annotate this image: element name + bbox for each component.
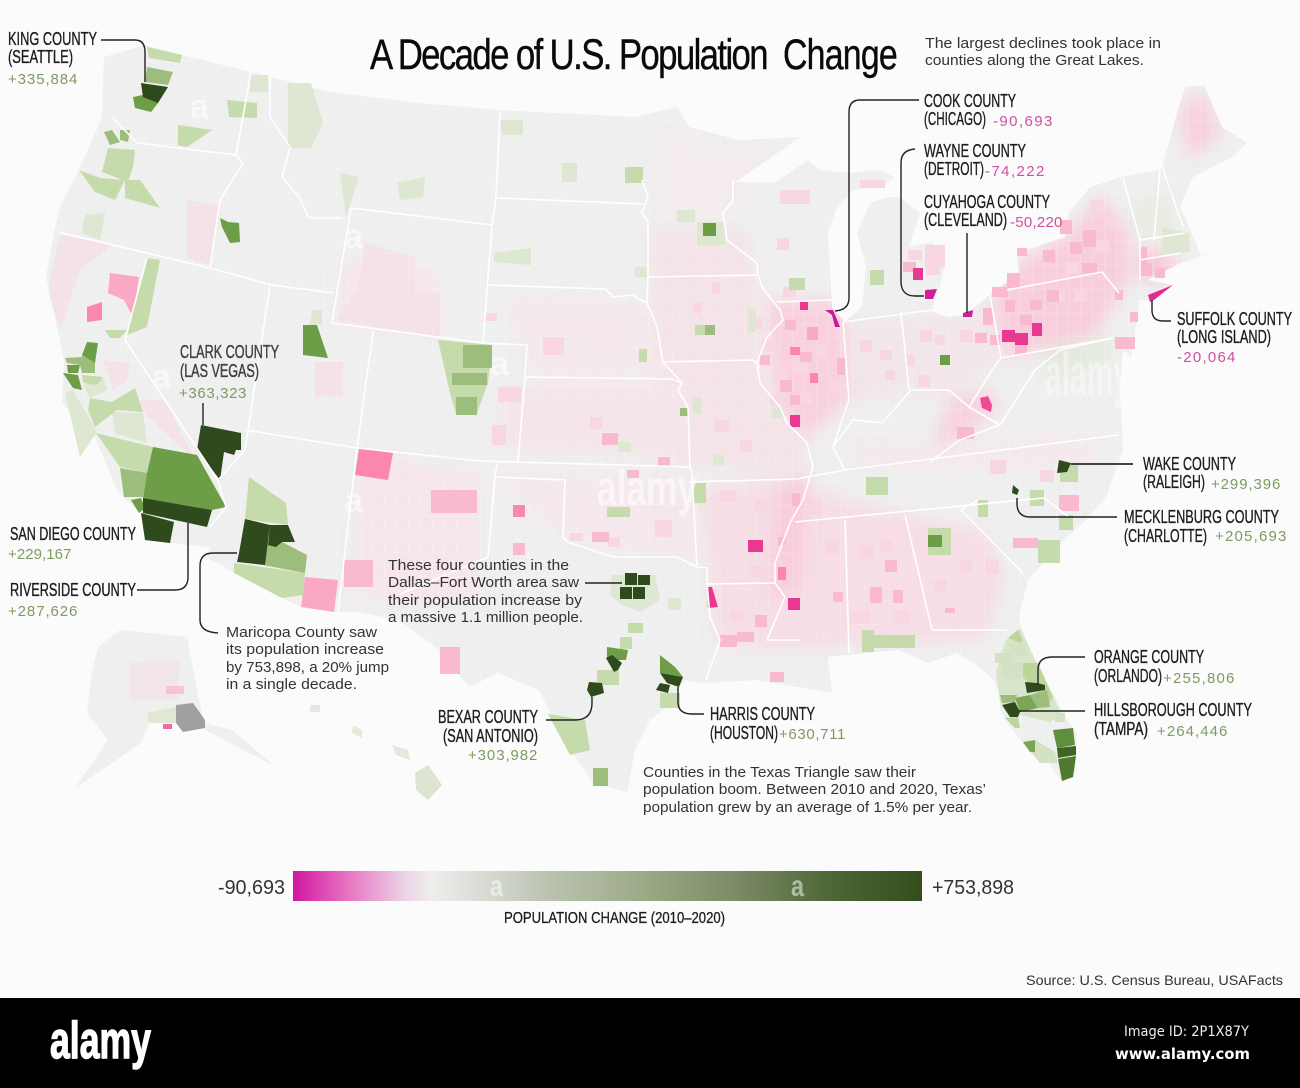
callout: Bexar County: BEXAR COUNTY xyxy=(438,707,538,727)
legend gradient bar xyxy=(293,871,922,901)
callout: Orange County: (ORLANDO) xyxy=(1094,666,1162,686)
map inset: Alaska xyxy=(75,630,276,788)
callout: Riverside County xyxy=(8,523,188,620)
callout: Wake County: WAKE COUNTY xyxy=(1143,454,1236,474)
watermarks: a xyxy=(490,345,510,383)
regional colour wash xyxy=(48,92,1223,650)
state borders xyxy=(58,72,1185,680)
callout: Orange County xyxy=(1038,647,1235,687)
gray county xyxy=(176,703,205,732)
callout: Dallas-Fort Worth: their population increase by xyxy=(388,592,583,609)
counties: growing green xyxy=(63,47,1190,786)
Orange County (Orlando) xyxy=(1025,682,1045,693)
callout: Dallas-Fort Worth: a massive 1.1 million people. xyxy=(388,609,583,626)
callout: Cuyahoga County: -50,220 xyxy=(1010,214,1063,231)
callout: King County: KING COUNTY xyxy=(8,29,97,49)
callout: Orange County: +255,806 xyxy=(1163,670,1235,687)
callout: Dallas-Fort Worth: These four counties in the xyxy=(388,557,569,574)
callout: Harris County xyxy=(678,687,846,743)
callout: Clark County: CLARK COUNTY xyxy=(180,342,279,362)
callout: Cuyahoga County xyxy=(924,192,1063,313)
callout: King County xyxy=(8,29,145,88)
counties: pale pink xyxy=(485,180,1117,624)
Dallas-Fort Worth counties xyxy=(620,573,650,599)
callout: Dallas-Fort Worth xyxy=(388,557,622,626)
callout: Mecklenburg County xyxy=(1017,498,1287,546)
callout: Hillsborough County xyxy=(1019,700,1252,740)
counties: strong pink and magenta xyxy=(87,268,1173,612)
image id: Image ID: 2P1X87Y xyxy=(1124,1024,1249,1040)
callout: Mecklenburg County: +205,693 xyxy=(1215,528,1287,545)
callout: Harris County: +630,711 xyxy=(779,726,846,743)
source: Source: U.S. Census Bureau, USAFacts xyxy=(1026,972,1283,988)
callout: Cuyahoga County: CUYAHOGA COUNTY xyxy=(924,192,1050,212)
title: A Decade of U.S. Population xyxy=(370,31,767,79)
counties: medium pink xyxy=(344,220,1165,682)
map inset: Hawaii xyxy=(310,705,442,800)
legend maximum: +753,898 xyxy=(932,877,1014,899)
land base xyxy=(46,45,1247,792)
callout: Wayne County: (DETROIT) xyxy=(924,159,984,179)
callout: King County: +335,884 xyxy=(8,71,78,88)
legend: a xyxy=(791,870,804,903)
callout: Riverside County: RIVERSIDE COUNTY xyxy=(10,580,136,600)
callout: Cook County: -90,693 xyxy=(993,113,1053,130)
callout: Cook County xyxy=(835,91,1053,311)
callout: Maricopa County: in a single decade. xyxy=(226,676,357,693)
callout: Hillsborough County: +264,446 xyxy=(1157,723,1228,740)
legend minimum: -90,693 xyxy=(218,877,285,899)
Cuyahoga County (Cleveland) xyxy=(963,310,973,317)
callout: Orange County: ORANGE COUNTY xyxy=(1094,647,1204,667)
callout: Harris County: HARRIS COUNTY xyxy=(710,704,815,724)
watermarks: a xyxy=(344,482,364,520)
alamy logo: alamy xyxy=(50,1012,151,1070)
callout: Wake County xyxy=(1071,454,1281,493)
note: Texas Triangle: population boom. Between 2010 and 2020, Texas’ xyxy=(643,781,986,798)
callout: Hillsborough County: (TAMPA) xyxy=(1094,719,1148,739)
callout: San Diego County xyxy=(8,524,136,563)
watermarks: alamy xyxy=(1045,341,1130,408)
King County (Seattle) xyxy=(141,83,168,103)
callout: Maricopa County xyxy=(200,553,389,693)
callout: King County: (SEATTLE) xyxy=(8,47,73,67)
Travis County xyxy=(606,655,622,672)
callout: Maricopa County: Maricopa County saw xyxy=(226,624,377,641)
callout: Mecklenburg County: (CHARLOTTE) xyxy=(1124,526,1207,546)
San Diego County xyxy=(141,513,174,543)
callout: San Diego County: SAN DIEGO COUNTY xyxy=(10,524,136,544)
watermarks: a xyxy=(152,358,172,396)
title: Change xyxy=(783,31,897,79)
Clark County (Las Vegas) xyxy=(197,425,241,480)
callout: Clark County: (LAS VEGAS) xyxy=(180,361,259,381)
callout: Clark County xyxy=(179,342,279,425)
county grid texture xyxy=(60,96,1224,648)
callout: Cuyahoga County: (CLEVELAND) xyxy=(924,210,1007,230)
Suffolk County (Long Island) xyxy=(1148,285,1173,302)
note: Texas Triangle: Counties in the Texas Triangle saw their xyxy=(643,764,916,781)
subtitle xyxy=(925,35,1161,69)
subtitle: counties along the Great Lakes. xyxy=(925,52,1144,69)
callout: Clark County: +363,323 xyxy=(179,385,247,402)
callout: Bexar County xyxy=(438,697,592,764)
callout: Bexar County: (SAN ANTONIO) xyxy=(443,726,538,746)
callout: Riverside County: +287,626 xyxy=(8,603,78,620)
Maricopa County xyxy=(237,519,295,565)
watermarks: a xyxy=(190,88,210,126)
Riverside County xyxy=(143,498,212,527)
watermarks: a xyxy=(344,218,364,256)
watermarks: alamy xyxy=(597,460,697,516)
legend xyxy=(218,870,1014,927)
subtitle: The largest declines took place in xyxy=(925,35,1161,52)
callout: Wake County: +299,396 xyxy=(1211,476,1281,493)
Wake County (Raleigh) xyxy=(1057,460,1071,473)
callout: Cook County: COOK COUNTY xyxy=(924,91,1016,111)
note: Texas Triangle: population grew by an average of 1.5% per year. xyxy=(643,799,972,816)
callout: Wake County: (RALEIGH) xyxy=(1143,472,1205,492)
alamy footer bar xyxy=(0,998,1300,1088)
callout: Bexar County: +303,982 xyxy=(468,747,538,764)
callout: San Diego County: +229,167 xyxy=(8,546,72,563)
callout: Maricopa County: its population increase xyxy=(226,641,384,658)
Anchorage region counties xyxy=(147,707,176,723)
Hillsborough County (Tampa) xyxy=(1002,702,1020,717)
pale pink regions xyxy=(48,200,440,460)
callout: Wayne County: -74,222 xyxy=(985,163,1045,180)
counties: Florida xyxy=(995,628,1076,781)
Wayne County (Detroit) xyxy=(925,289,937,299)
Harris County (Houston) xyxy=(656,673,683,693)
site url: www.alamy.com xyxy=(1115,1045,1250,1063)
callout: Maricopa County: by 753,898, a 20% jump xyxy=(226,659,389,676)
note: Texas Triangle xyxy=(643,764,986,816)
legend title: POPULATION CHANGE (2010–2020) xyxy=(504,910,725,927)
legend: a xyxy=(490,870,503,903)
Mecklenburg County (Charlotte) xyxy=(1012,485,1019,495)
Cook County (Chicago) xyxy=(825,310,840,327)
callout: Suffolk County xyxy=(1152,300,1292,366)
callout: Dallas-Fort Worth: Dallas–Fort Worth area saw xyxy=(388,574,579,591)
watermarks xyxy=(152,88,1130,520)
Bexar County (San Antonio) xyxy=(587,682,604,697)
callout: Suffolk County: -20,064 xyxy=(1177,349,1236,366)
callout: Wayne County: WAYNE COUNTY xyxy=(924,141,1026,161)
callout: Wayne County xyxy=(901,141,1045,296)
callout: Harris County: (HOUSTON) xyxy=(710,723,778,743)
callout: Cook County: (CHICAGO) xyxy=(924,109,986,129)
